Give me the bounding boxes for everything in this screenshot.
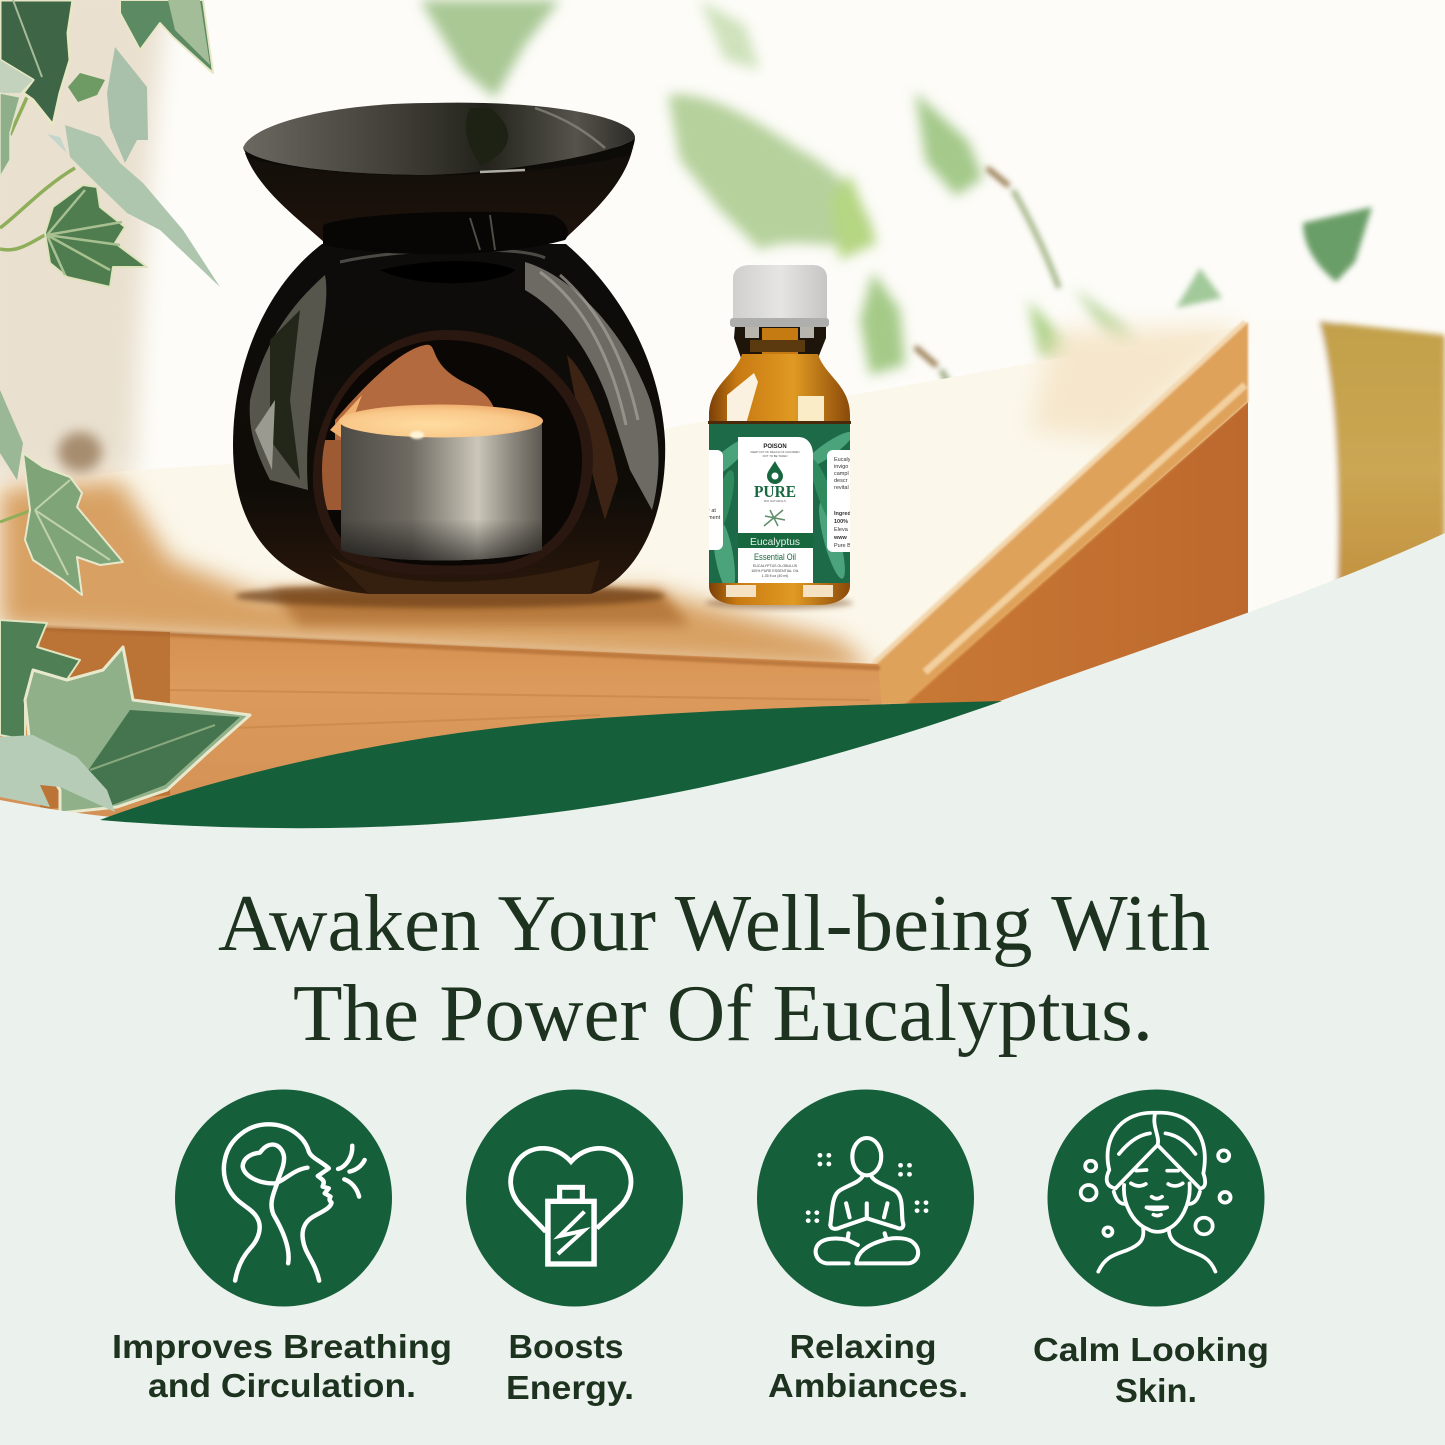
icon: breathing: [175, 1090, 392, 1306]
title: Awaken Your Well-being With: [218, 880, 1210, 968]
bottle cap: [733, 265, 827, 318]
label: relaxing ambiances: Relaxing: [790, 1328, 936, 1365]
burner body: [233, 244, 665, 594]
bottle label: ment: [708, 515, 721, 521]
blurred stems: [915, 168, 1059, 410]
bottle label: 100% PURE ESSENTIAL OIL: [751, 569, 799, 573]
label: calm looking skin: [1033, 1331, 1269, 1409]
table right face: [885, 402, 1248, 720]
label: boosts energy: Energy.: [506, 1369, 634, 1406]
icon: meditation: [757, 1090, 974, 1306]
bottle label: descr: [834, 478, 848, 484]
bottle label: Essential Oil: [754, 552, 796, 562]
front white panel: [738, 437, 813, 584]
table reflection under burner: [270, 590, 690, 625]
label: boosts energy: [506, 1328, 634, 1406]
bottle label: POISON: [763, 444, 787, 450]
label: improves breathing: [112, 1328, 452, 1404]
blurred side leaves: [1176, 207, 1372, 308]
burner underside of dish: [245, 147, 633, 254]
warm wood patch on the table: [0, 480, 875, 672]
curtain and golden object on the right: [1250, 320, 1445, 630]
bottle label: revital: [834, 485, 849, 491]
burner neck: [323, 212, 568, 254]
label: improves breathing: Improves Breathing: [112, 1328, 452, 1365]
bottle label: 100%: [834, 519, 848, 525]
background photo scene: [0, 0, 1445, 830]
table corner edge: [873, 322, 1248, 705]
icon: energy heart battery: [466, 1090, 683, 1306]
label: relaxing ambiances: Ambiances.: [768, 1367, 968, 1404]
label: calm looking skin: Calm Looking: [1033, 1331, 1269, 1368]
label: improves breathing: and Circulation.: [148, 1367, 416, 1404]
burner opening rim: [313, 330, 593, 576]
bottle label: Eleva: [834, 527, 849, 533]
bottle label: PURE: [754, 482, 796, 501]
bottle label: Ingred: [834, 511, 851, 517]
side panels: [709, 450, 723, 550]
label: calm looking skin: Skin.: [1115, 1372, 1197, 1409]
ivy leaves bottom left: [0, 620, 250, 813]
bottle label: Eucalyptus: [750, 536, 800, 548]
blurred wall on the left: [0, 0, 170, 480]
bottle label: BIO NATURALS: [764, 499, 786, 503]
title: The Power Of Eucalyptus.: [293, 970, 1153, 1058]
table front face: [0, 626, 884, 830]
blurred background foliage: [420, 0, 1157, 375]
burner top dish: [243, 103, 635, 175]
bottle label: Eucaly: [834, 457, 851, 463]
title: [218, 880, 1210, 1058]
bottle label: campl: [834, 471, 849, 477]
burner shadow: [235, 584, 665, 608]
green curved swoosh: [100, 701, 1002, 828]
curved panel background: [0, 533, 1445, 1445]
bottle label: Pure B: [834, 543, 851, 549]
burner opening interior: [322, 340, 582, 566]
bottle label: 1.35 fl oz (40 ml): [762, 574, 788, 578]
table top, blown out: [0, 325, 1245, 672]
bottle label: EUCALYPTUS GLOBULUS: [753, 564, 798, 568]
label: relaxing ambiances: [768, 1328, 968, 1404]
ivy leaves top left: [0, 0, 220, 287]
bottle shadow: [705, 597, 853, 609]
product bottle: [694, 265, 857, 609]
bottle label: KEEP OUT OF REACH OF CHILDREN: [750, 450, 800, 454]
bottle neck: [734, 326, 826, 358]
body reflections: [525, 262, 658, 510]
bottle label: r at: [708, 508, 716, 514]
oil burner: [233, 103, 665, 595]
blurred dark object on shelf: [58, 432, 102, 472]
tealight candle: [339, 404, 543, 560]
bottle label: www: [833, 535, 848, 541]
bottle label: NOT TO BE TAKEN: [763, 454, 787, 458]
bottle label: [709, 424, 850, 583]
icon: calm face: [1048, 1090, 1264, 1306]
bottle label: invigo: [834, 464, 848, 470]
herb sprig: [764, 510, 785, 526]
ivy leaves left middle: [0, 390, 123, 595]
label: boosts energy: Boosts: [508, 1328, 624, 1365]
bottle amber body: [709, 354, 850, 605]
